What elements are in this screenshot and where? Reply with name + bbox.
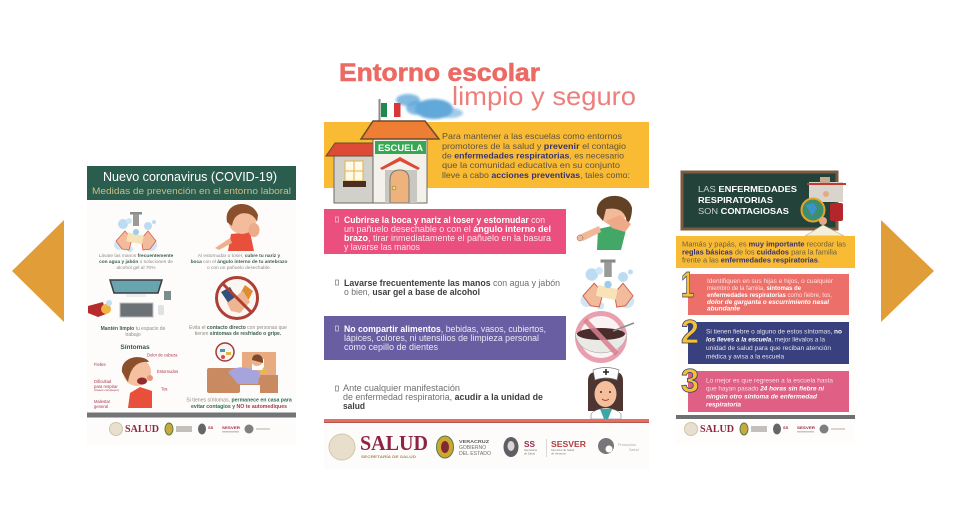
label: ESCUELA sign: ESCUELA [378, 143, 424, 153]
symptom labels: Tos [161, 386, 168, 392]
step 3: que hayan pasado 24 horas sin fiebre ni [706, 386, 824, 392]
item 4: go to health unit [336, 383, 543, 411]
step 1: 1 [681, 264, 694, 305]
logo: SS: SS [524, 440, 536, 449]
chalkboard heading: RESPIRATORIAS [698, 195, 773, 205]
item 2: wash hands: o bien, usar gel a base de alcohol [344, 287, 480, 297]
icon: clouds [396, 94, 463, 119]
logo: SS: Secretaría [524, 448, 537, 452]
arrow: previous [12, 220, 64, 322]
item 1: cover mouth: y lavarse las manos [344, 242, 420, 252]
step 2: unidad de salud para que reciban atención [706, 346, 831, 352]
icon: boy covering cough [215, 204, 260, 251]
icon: school [326, 99, 439, 203]
logo: Secretaría de Salud: SECRETARÍA DE SALUD [361, 454, 416, 459]
symptom labels: Fiebre [94, 362, 107, 367]
caption: stay home: Si tienes síntomas, permanece en casa para [186, 398, 292, 404]
step 3: respiratoria [706, 402, 742, 408]
chalkboard heading [682, 172, 837, 229]
caption: cover cough [191, 253, 287, 271]
logo: Veracruz: GOBIERNO [459, 445, 486, 451]
icon: no handshake [216, 278, 258, 318]
step 2: los lleves a la escuela , mejor llévalos a la [706, 338, 826, 344]
logo: Secretaría de Salud [329, 431, 428, 460]
icon: boy sneezing [577, 196, 632, 250]
caption: cover cough: Al estornudar o toser, cubre tu nariz y [198, 253, 281, 259]
caption: stay home: evitar contagios y NO te automediques [191, 404, 287, 410]
panel: COVID-19 workplace poster [87, 166, 296, 445]
step 2: Si tienen fiebre o alguno de estos síntomas, no [706, 330, 842, 336]
caption: avoid contact: tienen síntomas de resfriado o gripe. [195, 331, 282, 337]
caption: wash hands [99, 253, 174, 271]
item 1: cover mouth [324, 209, 566, 254]
caption: stay home [186, 398, 292, 410]
step 3: ningún otro síntoma de enfermedad [706, 394, 817, 400]
icon: sick child [122, 357, 153, 408]
item 3: do not share: como cepillo de dientes [344, 342, 438, 352]
logo: Promoción de la Salud: Salud [629, 448, 639, 452]
icon: school and globe [802, 177, 846, 236]
chalkboard heading: SON CONTAGIOSAS [698, 206, 789, 216]
logo: SESVER: de Veracruz [551, 452, 567, 456]
logo: SS [504, 437, 537, 457]
intro text: que la comunidad educativa en su conjunto [442, 160, 620, 170]
intro text: de enfermedades respiratorias , es necesario [442, 150, 624, 160]
icon: no sharing food [575, 314, 634, 360]
icon: computer [88, 280, 171, 317]
symptom labels: (Casos complejos) [94, 388, 119, 392]
step 1: Identifiquen en sus hijas e hijos, o cualquier [707, 279, 833, 285]
caption: cover cough: boca con el ángulo interno de tu antebrazo [191, 259, 287, 265]
step 3 [681, 362, 849, 412]
step 2: 2 [681, 313, 699, 350]
icon: no pills [216, 343, 234, 361]
header: Nuevo coronavirus: Medidas de prevención en el entorno laboral [92, 186, 291, 196]
step 1: miembro de la familia, síntomas de [707, 286, 802, 292]
symptom labels [94, 352, 178, 409]
symptom labels: Estornudos [157, 369, 178, 374]
intro band [324, 122, 649, 188]
icon: child in bed [207, 352, 278, 393]
step 1 [681, 264, 849, 315]
symptom labels: Dolor de cabeza [147, 352, 178, 358]
icon: nurse [588, 368, 623, 419]
caption: clean workspace: Mantén limpio tu espacio de [101, 326, 166, 332]
panel: school poster [324, 59, 649, 470]
header: Nuevo coronavirus: Nuevo coronavirus (COVID-19) [103, 170, 277, 184]
symptom labels: para respirar [94, 384, 118, 389]
item 1: cover mouth: un pañuelo desechable o con el ángulo interno del [344, 224, 551, 234]
step 1: enfermedades respiratorias como fiebre, tos, [707, 293, 832, 299]
logo: Promoción de la Salud [598, 438, 639, 454]
item 3: do not share: No compartir alimentos, bebidas, vasos, cubiertos, [344, 324, 546, 334]
footer logos [684, 422, 845, 436]
item 1: cover mouth: brazo, tirar inmediatamente el pañuelo en la basura [344, 233, 551, 243]
symptom labels: Malestar [94, 399, 111, 404]
intro text: promotores de la salud y prevenir el contagio [442, 141, 626, 151]
header: Nuevo coronavirus [87, 166, 296, 200]
intro text [442, 131, 630, 180]
step 2: médica y avisa a la escuela [706, 354, 785, 360]
caption: wash hands: Lávate las manos frecuentemente [99, 253, 174, 259]
item 4: go to health unit: Ante cualquier manifestación [343, 383, 460, 393]
logo: SESVER: SESVER [551, 440, 586, 449]
caption: wash hands: con agua y jabón o soluciones de [99, 259, 173, 265]
intro band: Mamás y papás, es muy importante recordar las [682, 242, 847, 248]
item 3: do not share [324, 316, 566, 360]
logo: Secretaría de Salud: SALUD [360, 431, 428, 455]
intro band: reglas básicas de los cuidados para la familia [682, 250, 837, 256]
logo: Veracruz: DEL ESTADO [459, 451, 491, 457]
logo: SS: de Salud [524, 452, 535, 456]
divider strip [324, 419, 649, 424]
intro band [676, 236, 855, 268]
title: Entorno escolar [339, 59, 540, 87]
panel: respiratory diseases poster [676, 172, 855, 445]
logo: SESVER [551, 440, 586, 456]
title: limpio y seguro [452, 81, 636, 111]
step 1: dolor de garganta o escurrimiento nasal [707, 300, 829, 306]
item 4: go to health unit: salud [343, 401, 365, 411]
logo: SESVER: Servicios de Salud [551, 448, 575, 452]
footer logos [110, 422, 270, 436]
footer: logos [324, 423, 649, 470]
icon: washing hands [580, 260, 634, 310]
arrow: next [881, 220, 934, 322]
heading: Síntomas: Síntomas [120, 344, 150, 351]
caption: clean workspace: trabajo [125, 332, 141, 338]
step 1: abundante [707, 306, 741, 312]
step 2 [681, 313, 849, 364]
step 3: 3 [681, 362, 699, 399]
icon: washing hands [114, 212, 157, 252]
step 3: Lo mejor es que regresen a la escuela hasta [706, 378, 834, 384]
intro text: Para mantener a las escuelas como entornos [442, 131, 622, 141]
intro text: lleve a cabo acciones preventivas , tales como: [442, 170, 630, 180]
item 2: wash hands: Lavarse frecuentemente las manos con agua y jabón [344, 278, 560, 288]
item 2: wash hands [336, 278, 560, 297]
caption: cover cough: o con un pañuelo desechable. [207, 265, 271, 271]
chalkboard heading: LAS ENFERMEDADES [698, 184, 797, 194]
logo: Promoción de la Salud: Promoción [618, 443, 636, 447]
item 3: do not share: lápices, colores, ni utensilios de limpieza personal [344, 333, 539, 343]
logo: Veracruz: VERACRUZ [459, 439, 489, 445]
caption: avoid contact: Evita el contacto directo con personas que [189, 325, 287, 331]
caption: avoid contact [189, 325, 287, 337]
caption: clean workspace [101, 326, 166, 338]
caption: wash hands: alcohol gel al 70% [117, 265, 156, 271]
symptom labels: Dificultad [94, 379, 112, 384]
item 4: go to health unit: de enfermedad respiratoria, acudir a la unidad de [343, 392, 543, 402]
item 1: cover mouth: Cubrirse la boca y nariz al toser y estornudar con [344, 215, 545, 225]
logo: Veracruz [436, 436, 491, 458]
title [339, 59, 636, 111]
intro band: frente a las enfermedades respiratorias . [682, 258, 820, 264]
symptom labels: general [94, 404, 108, 409]
